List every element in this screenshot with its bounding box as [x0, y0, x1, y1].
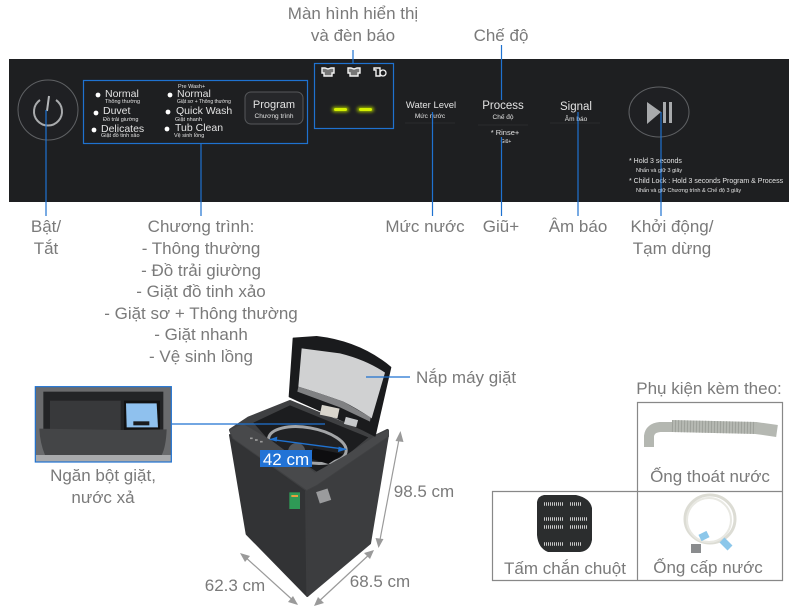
program list: Giặt sơ + Thông thường	[177, 99, 231, 105]
signal button	[560, 101, 592, 123]
label: programs: Chương trình:	[148, 217, 254, 236]
program list: Tub Clean	[175, 122, 223, 134]
washing machine illustration	[229, 337, 391, 596]
callout frames and leader lines	[46, 45, 661, 216]
program list: Vệ sinh lồng	[174, 133, 204, 139]
label: mode: Chế độ	[474, 26, 528, 45]
accessories table	[492, 402, 782, 580]
program list: Normal	[177, 88, 211, 100]
program list: Normal	[105, 88, 139, 100]
program list: Pre Wash+	[178, 84, 205, 90]
process button: Process	[482, 100, 524, 112]
program list: Đồ trải giường	[103, 117, 138, 123]
dimension: tub diameter: 42 cm	[263, 450, 309, 469]
label: lid: Nắp máy giặt	[416, 368, 516, 387]
label: start pause: Tạm dừng	[633, 239, 711, 258]
signal button: Âm báo	[565, 114, 588, 123]
water level button: Mức nước	[415, 113, 446, 120]
label: drawer: Ngăn bột giặt,	[50, 466, 156, 485]
detergent drawer thumbnail	[35, 387, 171, 462]
dimension: height: 98.5 cm	[394, 482, 454, 501]
label: display: Màn hình hiển thị	[288, 4, 418, 23]
program button: Chương trình	[255, 113, 294, 120]
hold notes: * Child Lock : Hold 3 seconds Program & Process	[629, 178, 784, 185]
dimension: depth: 62.3 cm	[205, 576, 265, 595]
label: rinse: Giũ+	[483, 217, 519, 236]
label: water level: Mức nước	[385, 217, 465, 236]
program list: Giặt nhanh	[175, 117, 202, 123]
accessory: rodent guard: Tấm chắn chuột	[504, 559, 626, 578]
label: programs: - Giặt sơ + Thông thường	[104, 304, 298, 323]
signal button: Signal	[560, 101, 592, 113]
label: programs: - Đồ trải giường	[141, 261, 261, 280]
program list: Thông thường	[105, 99, 140, 105]
label: programs: - Giặt đồ tinh xảo	[136, 282, 266, 301]
display icons and lights	[322, 68, 386, 112]
process button: Chế độ	[493, 112, 514, 121]
dimension arrows	[240, 431, 404, 606]
hold notes: * Hold 3 seconds	[629, 158, 682, 165]
label: programs: - Thông thường	[142, 239, 260, 258]
program list: Delicates	[101, 123, 144, 135]
icon: power button	[18, 80, 78, 140]
label: drawer	[50, 466, 156, 507]
program button: Program	[253, 99, 295, 111]
control panel	[9, 59, 789, 202]
label: power: Tắt	[34, 239, 59, 258]
hold notes: Nhấn và giữ 3 giây	[636, 168, 682, 174]
accessory: drain hose: Ống thoát nước	[650, 466, 770, 486]
label: drawer: nước xả	[71, 488, 135, 507]
icon: start pause button	[629, 87, 689, 137]
label: display	[288, 4, 418, 45]
leader lines to drawer and lid	[172, 377, 410, 424]
process button: * Rinse+	[491, 128, 520, 137]
program list: Duvet	[103, 105, 131, 117]
label: power: Bật/	[31, 217, 61, 236]
hold notes: Nhấn và giữ Chương trình & Chế độ 3 giây	[636, 188, 741, 194]
label: display: và đèn báo	[311, 26, 395, 45]
label: start pause	[631, 217, 714, 258]
program list: Giặt đồ tinh xảo	[101, 133, 140, 139]
water level button	[406, 100, 456, 120]
program list	[92, 84, 232, 139]
process button	[482, 100, 524, 145]
program list: Quick Wash	[176, 105, 232, 117]
accessories heading: Phụ kiện kèm theo:	[636, 379, 782, 398]
program button	[245, 92, 303, 124]
accessory: drain hose	[649, 426, 777, 486]
accessory: inlet hose	[653, 495, 763, 577]
label: power	[31, 217, 61, 258]
label: programs	[104, 217, 298, 366]
label: programs: - Giặt nhanh	[154, 325, 248, 344]
label: signal: Âm báo	[549, 217, 607, 236]
dimension: width: 68.5 cm	[350, 572, 410, 591]
button shadows	[405, 123, 600, 125]
hold notes	[629, 158, 784, 194]
label: start pause: Khởi động/	[631, 217, 714, 236]
accessory: rodent guard	[504, 495, 626, 578]
accessory: inlet hose: Ống cấp nước	[653, 557, 763, 577]
water level button: Water Level	[406, 100, 456, 111]
process button: Giũ+	[501, 139, 511, 145]
label: programs: - Vệ sinh lồng	[149, 347, 253, 366]
